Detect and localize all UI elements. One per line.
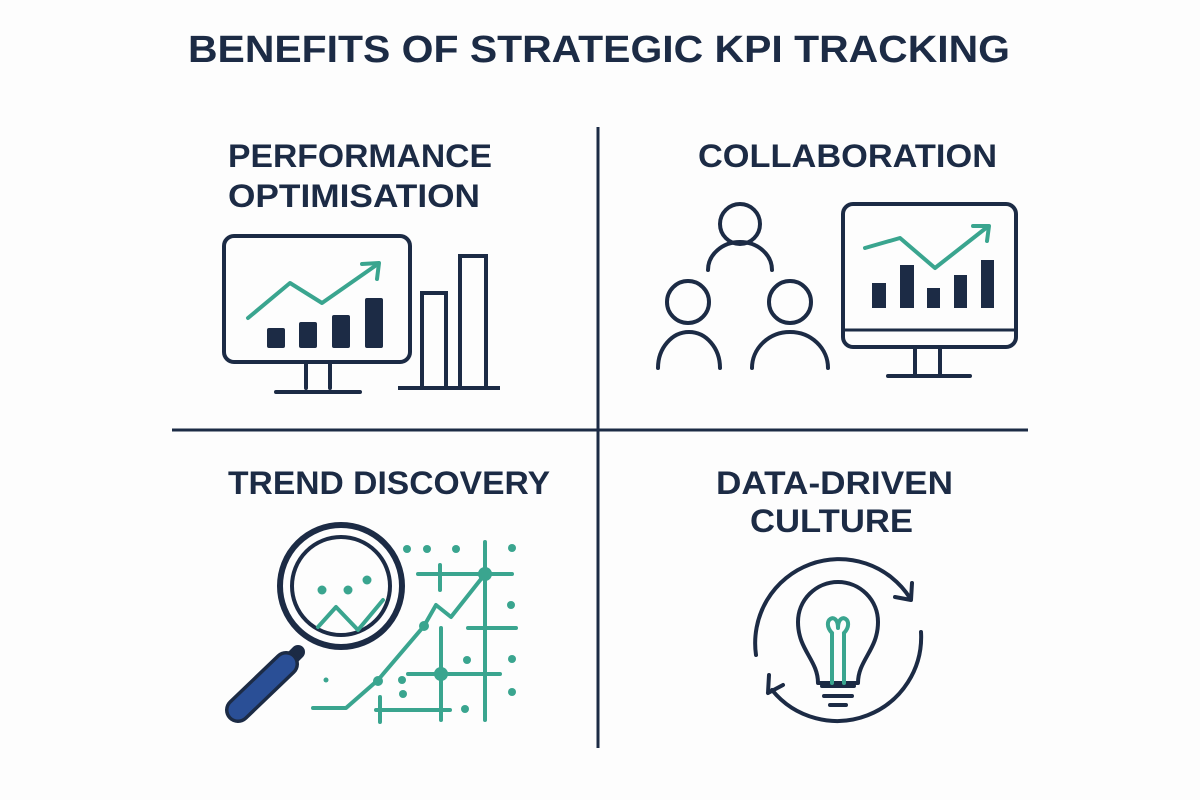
icon: cycle arrows with lightbulb: [755, 559, 921, 721]
title: BENEFITS OF STRATEGIC KPI TRACKING: [188, 29, 1010, 71]
panel: collaboration: [658, 138, 1016, 376]
icon: people: [658, 204, 828, 368]
heading: collaboration: COLLABORATION: [698, 138, 997, 174]
icon: outline bars: [398, 256, 500, 388]
heading: data-driven culture: DATA-DRIVEN: [716, 465, 953, 501]
icon: scatter grid: [313, 542, 516, 722]
icon: monitor with chart: [843, 204, 1016, 376]
heading: performance optimisation: OPTIMISATION: [228, 178, 480, 214]
icon: magnifier: [238, 525, 402, 710]
heading: performance optimisation: PERFORMANCE: [228, 138, 492, 174]
heading: data-driven culture: [716, 465, 953, 539]
heading: performance optimisation: [228, 138, 492, 214]
icon: monitor with chart: [224, 236, 410, 392]
panel: trend discovery: [228, 465, 550, 722]
heading: trend discovery: TREND DISCOVERY: [228, 465, 550, 501]
heading: data-driven culture: CULTURE: [750, 503, 913, 539]
panel: performance optimisation: [224, 138, 500, 392]
panel: data-driven culture: [716, 465, 953, 721]
